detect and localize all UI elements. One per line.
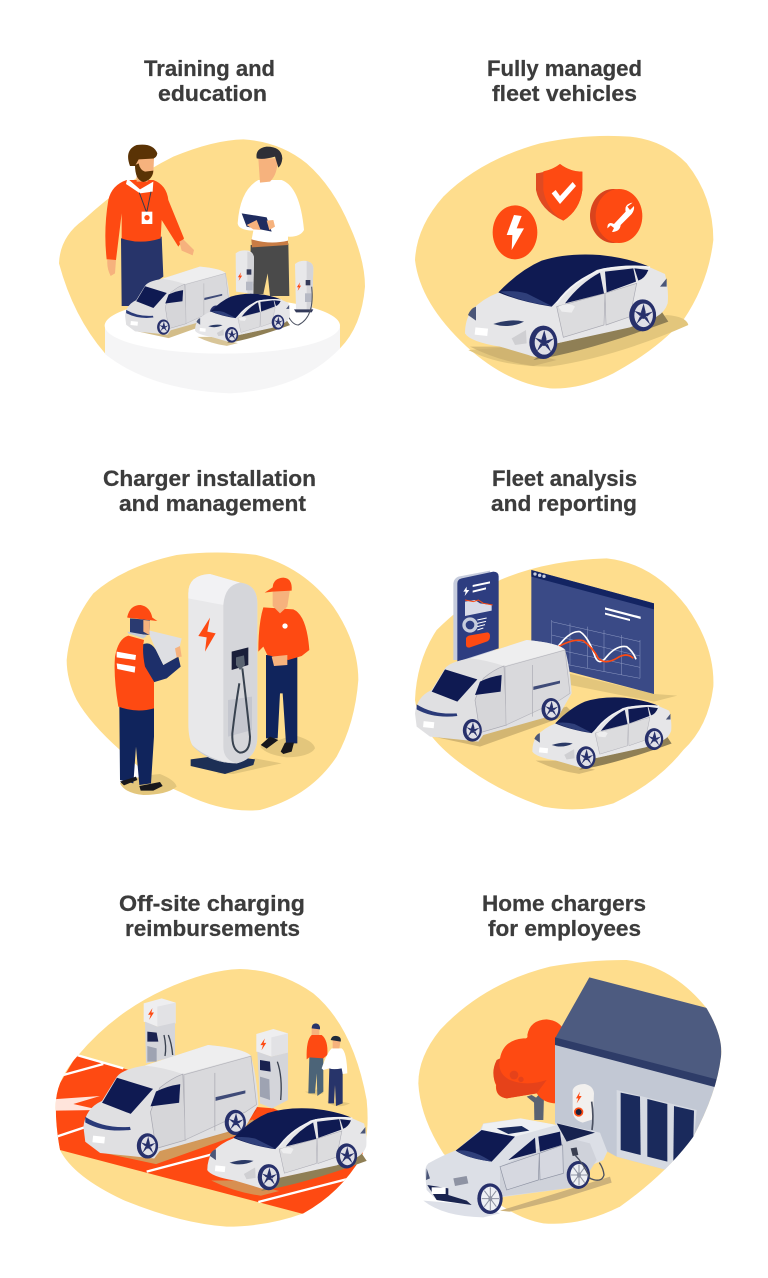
panel: training and education illustration (59, 139, 365, 393)
title: Home chargers for employees: for employees (488, 916, 641, 941)
icon: wrench badge (590, 189, 642, 243)
title: Fully managed fleet vehicles: Fully managed (487, 56, 642, 81)
title: Home chargers for employees (482, 891, 646, 941)
panel: off-site charging reimbursements illustration (50, 969, 370, 1227)
people: two men talking (305, 1023, 350, 1106)
charging station (188, 574, 257, 774)
title: Charger installation and management: and management (119, 491, 307, 516)
title: Charger installation and management (103, 466, 316, 516)
title: Fully managed fleet vehicles: fleet vehicles (492, 81, 637, 106)
car model (195, 294, 290, 346)
electric car (465, 254, 668, 366)
title: Off-site charging reimbursements: reimbursements (125, 916, 300, 941)
round white display platform (105, 298, 340, 393)
title: Fully managed fleet vehicles (487, 56, 642, 106)
shadows (423, 1201, 500, 1217)
orange tree (493, 1019, 563, 1120)
title: Training and education: education (158, 81, 267, 106)
worker in red shirt (258, 578, 309, 754)
title: Fleet analysis and reporting: and reporting (491, 491, 637, 516)
panel: home chargers for employees illustration (418, 960, 730, 1224)
icon: lightning badge (493, 205, 537, 259)
house with roof, charger and windows (555, 977, 730, 1170)
title: Off-site charging reimbursements: Off-site charging (119, 891, 305, 916)
panel: fully managed fleet vehicles illustration (415, 136, 713, 388)
trainer in red sweater (105, 145, 194, 306)
manager in white shirt with tablet (238, 147, 304, 296)
title: Fleet analysis and reporting (491, 466, 637, 516)
worker with hard hat and vest (115, 605, 182, 791)
icon: shield with check (536, 164, 582, 221)
electric pickup truck (425, 1118, 607, 1214)
panel: charger installation illustration (67, 552, 358, 810)
phone app mockup (453, 571, 499, 662)
shadow under car (468, 315, 688, 367)
electric car (532, 697, 672, 774)
title: Charger installation and management: Charger installation (103, 466, 316, 491)
title: Fleet analysis and reporting: Fleet analysis (492, 466, 637, 491)
panel: fleet analysis and reporting illustration (415, 558, 713, 809)
red parking bays (50, 1055, 370, 1214)
wall charger (573, 1084, 594, 1130)
van model (125, 267, 231, 338)
shadows (217, 735, 315, 774)
charging posts (236, 250, 313, 325)
title: Home chargers for employees: Home chargers (482, 891, 646, 916)
rear charging station (144, 998, 176, 1063)
analytics dashboard window (531, 570, 654, 694)
delivery van (83, 1045, 260, 1164)
delivery van (415, 640, 573, 747)
title: Training and education: Training and (144, 56, 275, 81)
front charging station (256, 1029, 288, 1108)
wall shadow (568, 673, 677, 702)
title: Training and education (144, 56, 275, 106)
electric car (207, 1108, 367, 1196)
title: Off-site charging reimbursements (119, 891, 305, 941)
